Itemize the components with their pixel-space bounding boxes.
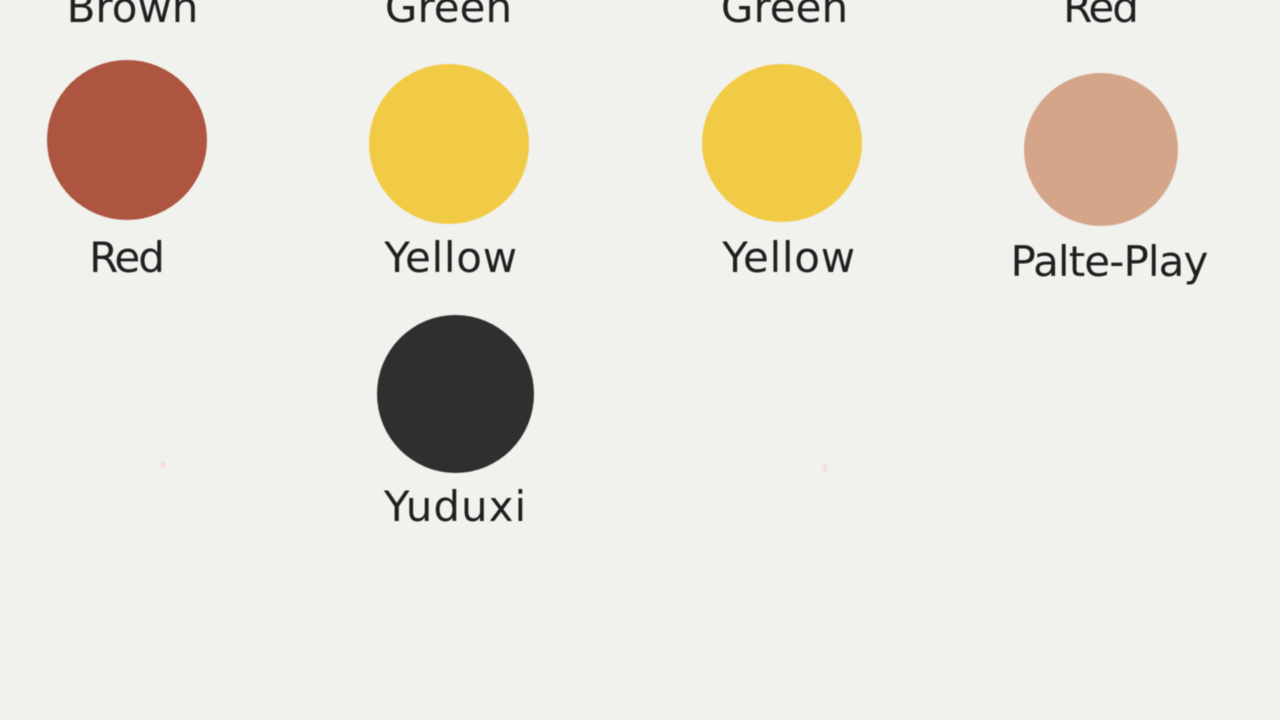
label: Yellow column 2: Yellow [384,233,518,282]
label: Red column 1: Red [89,233,163,282]
label: Palte-Play: Palte-Play [1011,237,1207,286]
swatch: black [377,315,534,473]
swatch: yellow column 3 [702,64,862,222]
swatch: yellow column 2 [369,64,529,224]
swatch: red [47,60,207,220]
label: Yellow column 3: Yellow [722,233,856,282]
label: Yuduxi: Yuduxi [384,482,527,531]
swatch: pale peach [1024,73,1178,226]
